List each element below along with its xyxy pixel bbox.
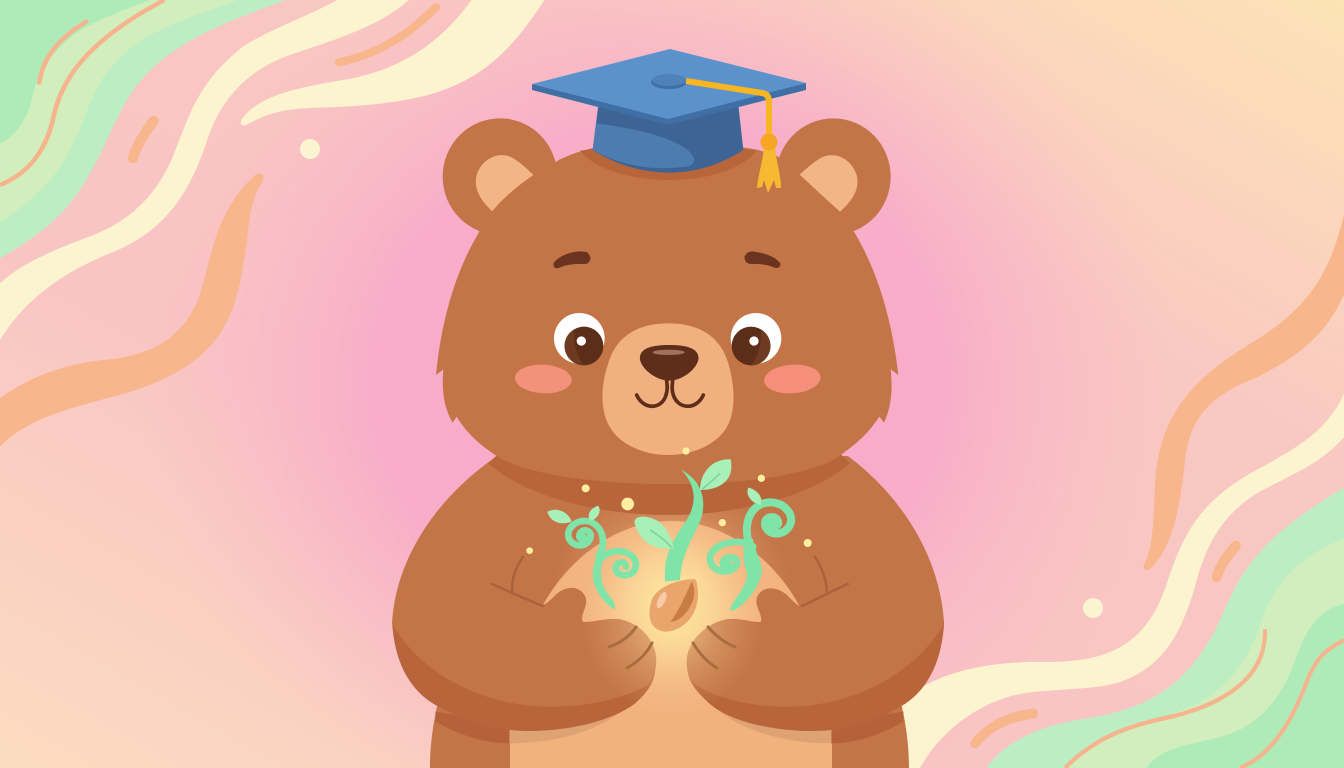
right eye	[731, 313, 781, 365]
hand glow	[582, 535, 762, 715]
tassel knob	[760, 134, 778, 150]
head shape	[436, 147, 898, 484]
belly	[510, 521, 832, 768]
cap highlight	[593, 123, 694, 168]
sprouts	[526, 447, 812, 632]
center sprout	[634, 459, 731, 582]
arm shadows on legs and belly	[435, 697, 903, 743]
tassel cord	[686, 81, 769, 136]
head group	[436, 105, 898, 515]
graduation cap top	[532, 49, 806, 193]
left eyebrow	[554, 252, 590, 268]
right arm	[687, 580, 944, 707]
mouth	[637, 381, 703, 406]
bottom-right waves	[900, 214, 1344, 768]
top-left waves	[0, 0, 545, 340]
left arm	[392, 580, 656, 707]
mortarboard	[532, 49, 806, 119]
right eyebrow	[745, 252, 780, 268]
torso	[392, 456, 944, 705]
button	[651, 74, 687, 89]
nose	[640, 345, 698, 381]
seed glow	[552, 480, 792, 720]
left ear	[443, 118, 557, 235]
finger lines	[609, 627, 735, 668]
tassel	[757, 148, 781, 193]
left eye	[554, 313, 605, 365]
seed	[649, 579, 698, 632]
floating dot left	[300, 139, 320, 159]
arms	[392, 580, 944, 731]
right cheek	[763, 363, 822, 395]
board edge	[532, 83, 806, 125]
neck band	[488, 433, 850, 515]
floating dot right	[1083, 598, 1103, 618]
arm creases	[492, 557, 848, 606]
left orange wave	[0, 173, 264, 447]
legs	[430, 705, 909, 768]
muzzle	[602, 323, 734, 455]
right arm underside	[687, 613, 944, 731]
right curly sprout	[710, 488, 791, 611]
cap shadow	[580, 140, 757, 180]
cap base	[593, 105, 743, 173]
left cheek	[514, 363, 572, 395]
bear	[392, 49, 944, 768]
sparkle dots	[526, 447, 812, 554]
left arm underside	[392, 613, 656, 731]
left curly sprout	[547, 506, 636, 609]
right ear	[776, 118, 891, 235]
